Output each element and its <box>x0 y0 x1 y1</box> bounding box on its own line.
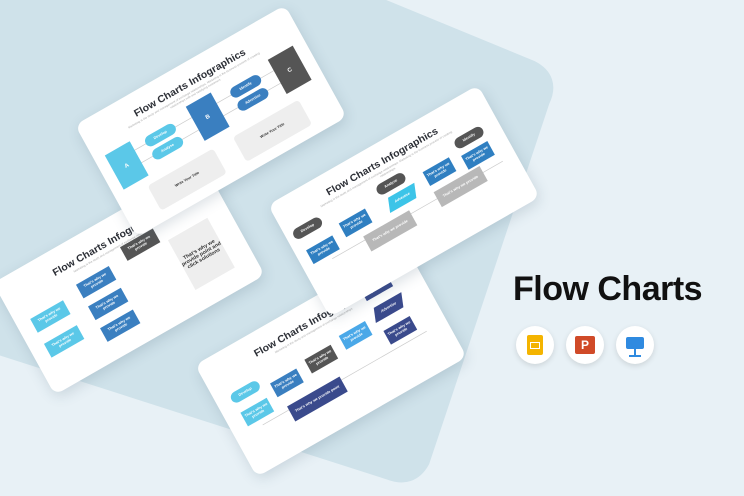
slide: middle flowchart: Advertise <box>394 191 410 204</box>
slide: middle flowchart: That's why we provide <box>342 213 367 230</box>
slide: A B C flowchart: C <box>286 66 293 74</box>
slide: left flowchart: That's why we provide <box>107 316 131 333</box>
slide: middle flowchart: That's why we provide <box>442 175 479 198</box>
slide: middle flowchart: Develop <box>300 223 315 234</box>
slide: middle flowchart: Analyse <box>384 178 398 189</box>
slide: bottom flowchart: That's why we provide <box>363 277 387 294</box>
slide: middle flowchart: That's why we provide <box>310 240 334 257</box>
slide: middle flowchart: That's why we provide <box>372 219 409 243</box>
slide: left flowchart: That's why we provide point and click solutions <box>181 239 222 270</box>
slide: A B C flowchart: Analyse <box>160 143 175 154</box>
heading: Flow Charts <box>513 270 702 308</box>
slide: bottom flowchart: Develop <box>238 386 253 397</box>
slide: bottom flowchart: That's why we provide <box>308 349 332 366</box>
icon: powerpoint <box>566 326 604 364</box>
slide: A B C flowchart <box>75 5 347 237</box>
slide: middle flowchart: Identify <box>462 132 476 143</box>
slide: left flowchart: That's why we provide <box>51 331 75 349</box>
slide: bottom flowchart: Advertise <box>381 301 396 314</box>
slide: bottom flowchart <box>195 245 467 477</box>
slide: bottom flowchart: That's why we provide <box>343 325 367 343</box>
slide: bottom flowchart: Marketing is the study and management of exchange relationships. <box>274 306 354 354</box>
slide: left flowchart: That's why we provide <box>83 272 107 289</box>
slide: left flowchart: That's why we provide <box>95 294 119 311</box>
slide: A B C flowchart: Develop <box>153 130 168 141</box>
slide: bottom flowchart: Flow Charts Infographics <box>252 286 367 359</box>
slide: A B C flowchart: Marketing is the study and management of exchange relationships. Marketing is the business process of creating relationships with and satisfying customers. <box>127 51 260 129</box>
slide: middle flowchart: Marketing is the study and management of exchange relationships. Marketing is the business process of creating relationships. <box>320 130 453 208</box>
icon: powerpoint: P <box>581 338 589 352</box>
slide: left flowchart: That's why we provide <box>127 235 151 252</box>
slide: left flowchart: Flow Charts Infographics <box>50 205 166 278</box>
slide: A B C flowchart: Identify <box>239 81 253 92</box>
slide: bottom flowchart: That's why we provide <box>274 373 298 390</box>
slide: A B C flowchart: Write Your Title <box>260 122 285 139</box>
slide: middle flowchart <box>268 85 540 317</box>
slide: bottom flowchart: That's why we provide point <box>294 385 340 413</box>
slide: A B C flowchart: B <box>204 113 211 121</box>
slide: middle flowchart: Flow Charts Infographics <box>324 125 440 198</box>
slide: left flowchart: Marketing is the study and management of exchange relationships. <box>73 226 152 273</box>
icon: google slides <box>516 326 554 364</box>
slide: A B C flowchart: A <box>123 162 130 169</box>
slide: bottom flowchart: That's why we provide <box>387 320 411 337</box>
slide: A B C flowchart: Flow Charts Infographics <box>132 46 247 119</box>
slide: A B C flowchart: Write Your Title <box>174 171 200 188</box>
slide: A B C flowchart: Advertise <box>244 93 261 106</box>
slide: left flowchart: That's why we provide <box>37 306 61 324</box>
slide: left flowchart <box>0 163 265 395</box>
slide: middle flowchart: That's why we provide <box>465 145 489 162</box>
icon: keynote <box>616 326 654 364</box>
slide: middle flowchart: That's why we provide <box>426 162 451 179</box>
slide: bottom flowchart: That's why we provide <box>244 402 268 419</box>
